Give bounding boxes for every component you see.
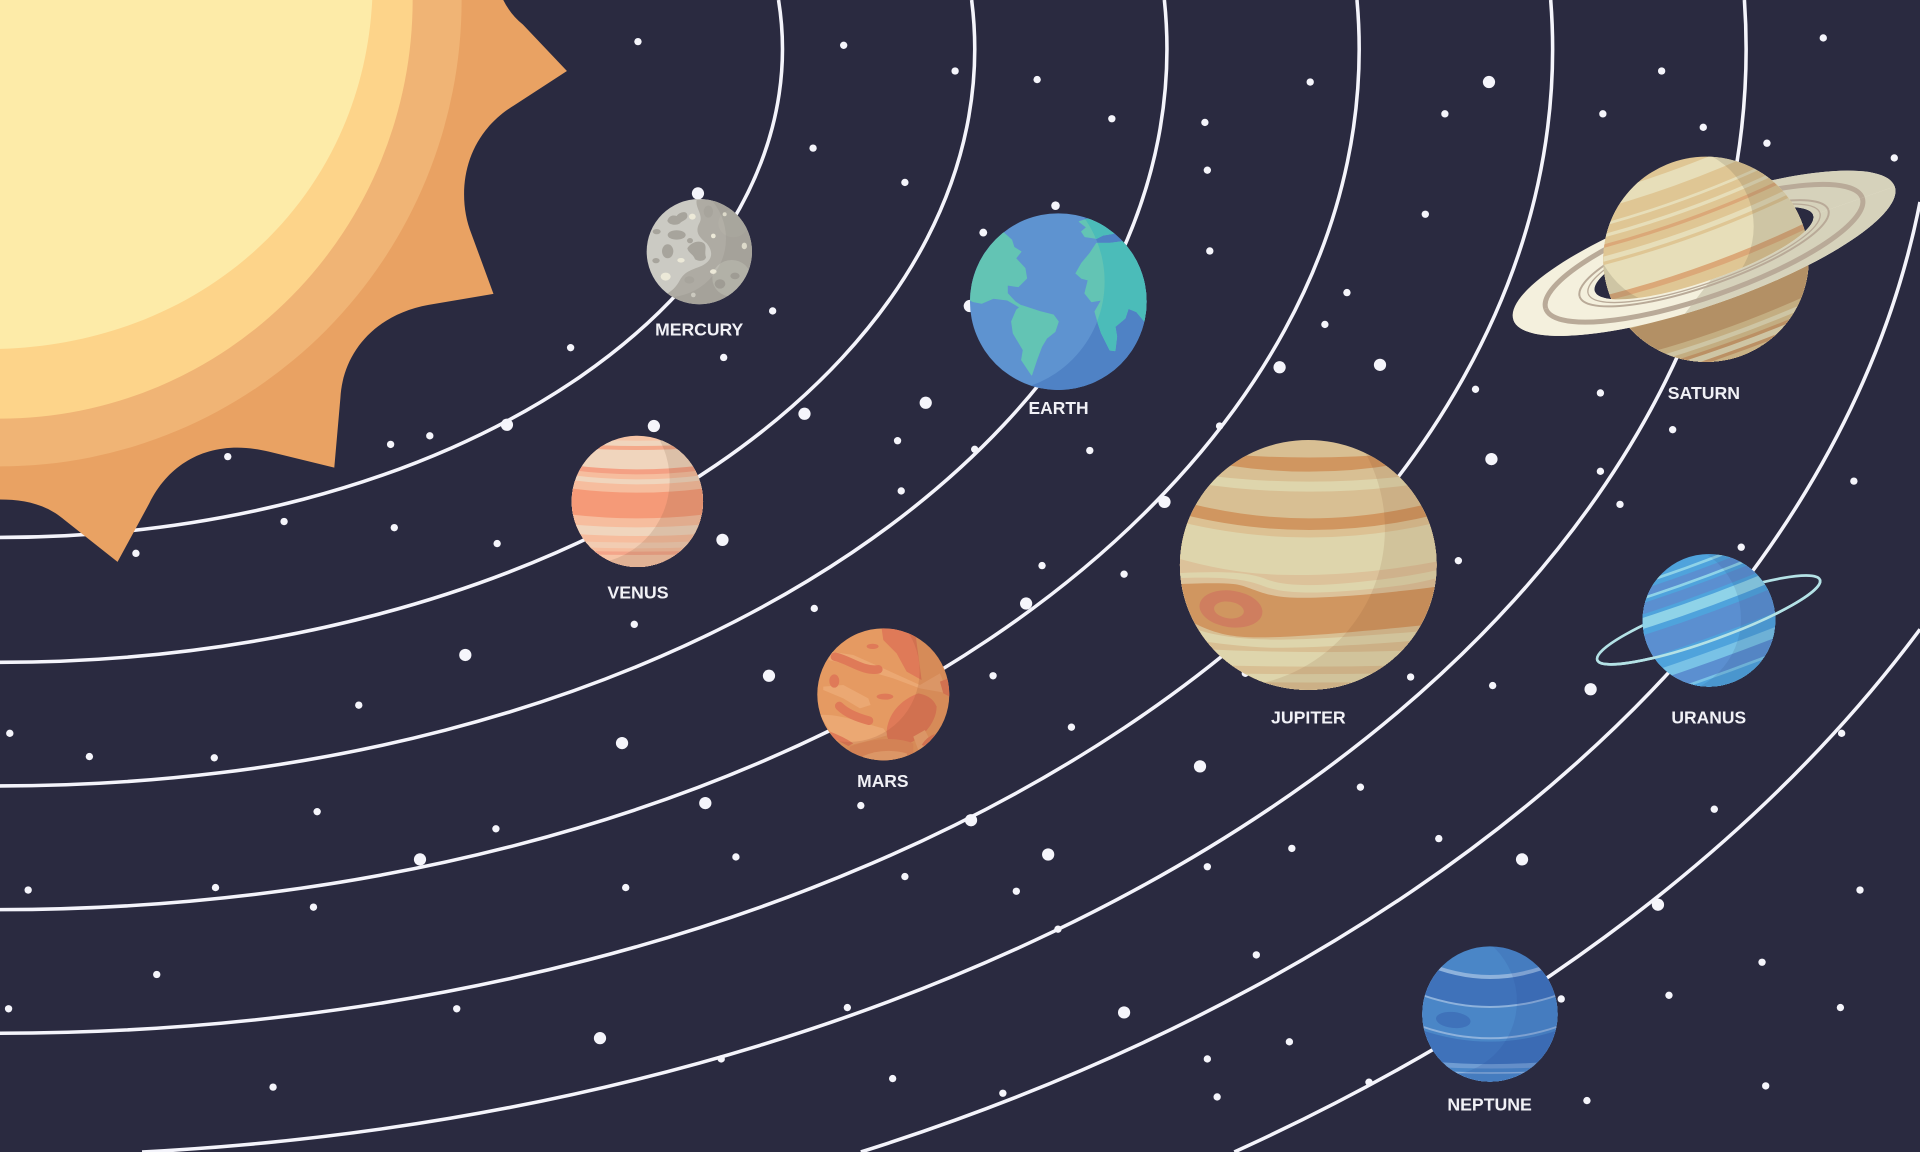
planet: Neptune (1422, 946, 1558, 1110)
planet: Mars (817, 628, 950, 787)
Saturn globe and rings (1512, 156, 1896, 362)
rings in front of the planet (1514, 186, 1896, 336)
planet: Venus (572, 436, 704, 598)
planet: Mercury (646, 199, 752, 336)
ring behind the planet (1590, 561, 1827, 679)
continents (970, 218, 1147, 376)
label: Jupiter: JUPITER (1271, 708, 1346, 728)
Earth globe (970, 213, 1147, 390)
label: Neptune: NEPTUNE (1447, 1094, 1532, 1114)
planet: Saturn (1512, 156, 1896, 399)
Neptune globe (1422, 946, 1558, 1082)
label: Mars: MARS (857, 771, 909, 791)
label: Venus: VENUS (607, 583, 669, 603)
Jupiter globe (1180, 440, 1437, 690)
Saturn body (1603, 156, 1808, 362)
planet: Earth (970, 213, 1147, 414)
label: Mercury: MERCURY (655, 319, 744, 339)
planet: Uranus (1596, 554, 1822, 724)
Mars globe (817, 628, 950, 760)
Uranus globe and ring (1596, 554, 1822, 687)
continents in shade (1086, 218, 1147, 352)
label: Earth: EARTH (1029, 398, 1089, 418)
rings behind the planet (1512, 170, 1896, 336)
Mercury globe (646, 199, 752, 304)
ring in front of the planet (1596, 580, 1822, 666)
label: Uranus: URANUS (1671, 708, 1746, 728)
Venus globe (572, 436, 704, 567)
label: Saturn: SATURN (1668, 383, 1740, 403)
sun (0, 0, 567, 562)
Uranus body (1642, 554, 1776, 687)
planet: Jupiter (1180, 440, 1437, 724)
